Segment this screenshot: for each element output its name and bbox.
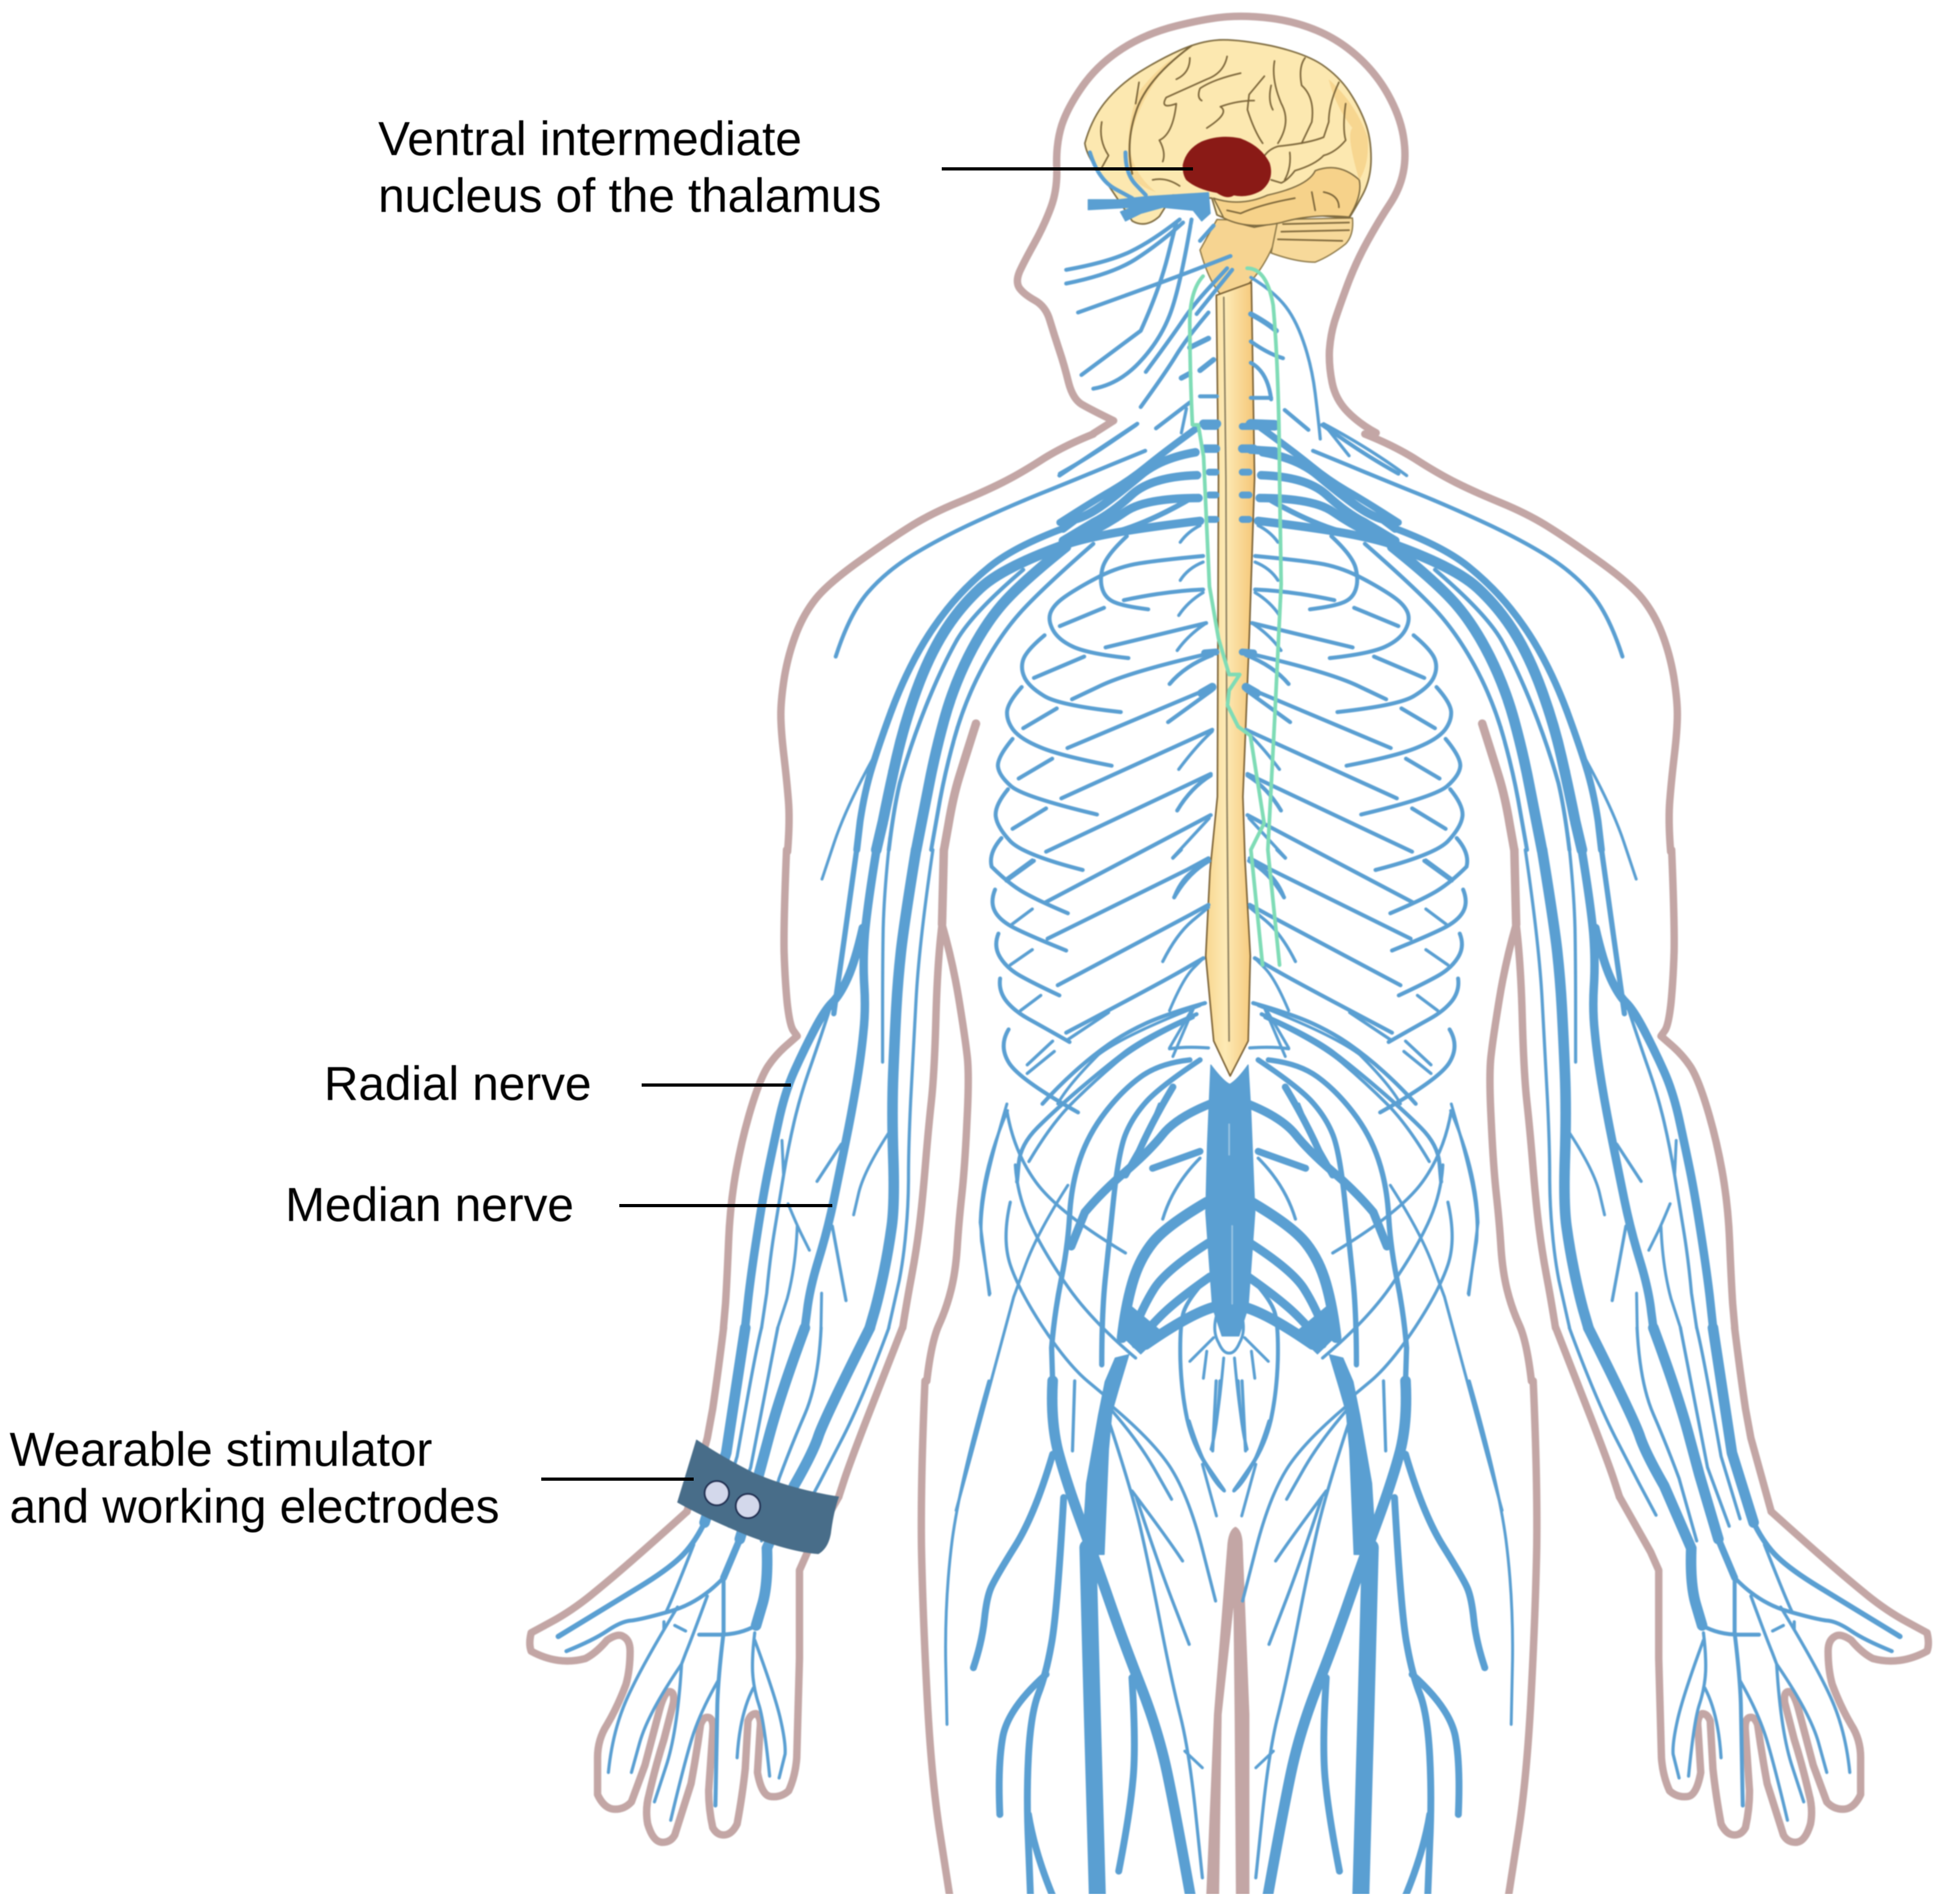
- brain: [1085, 40, 1371, 294]
- label: wearable stimulator: and working electrodes: [10, 1480, 499, 1533]
- thalamus target, dark red: [1183, 137, 1271, 197]
- arm nerves, upper arm to forearm: [745, 850, 1008, 1328]
- leader line: radial nerve: [642, 1083, 791, 1087]
- cranial and cervical nerves: [1060, 152, 1407, 475]
- all text labels: [10, 113, 881, 1533]
- inner leg outline: [1207, 1527, 1249, 1901]
- sulci: [1101, 46, 1345, 214]
- mid thoracic ribs: [991, 838, 1208, 1104]
- pelvic nerves: [1180, 1277, 1224, 1490]
- brachial plexus roots: [1060, 428, 1197, 523]
- frontal lobe shading: [1128, 58, 1173, 192]
- arm nerve bundle: [857, 528, 1063, 850]
- forearm and hand nerves: [558, 1328, 889, 1820]
- sciatic trunk: [1082, 1355, 1129, 1555]
- electrode 2: [736, 1494, 760, 1518]
- lumbar roots: [1071, 1104, 1210, 1246]
- leader line: wearable stimulator: [541, 1478, 694, 1481]
- leader line: thalamus: [942, 167, 1193, 170]
- cervical stubs, left: [1190, 338, 1208, 347]
- label: median nerve: Median nerve: [285, 1179, 574, 1232]
- spinal cord midline: [1224, 297, 1229, 1041]
- cervical stubs, right: [1251, 314, 1276, 331]
- trunk midline: [1229, 1124, 1232, 1304]
- head and neck outline: [1017, 16, 1405, 434]
- spine side branches: [1180, 562, 1203, 580]
- accessory nerve behind neck: [1251, 277, 1320, 439]
- left half of the body: [530, 425, 1246, 1904]
- flank nerves: [980, 1111, 1008, 1295]
- cerebrum: [1085, 40, 1371, 227]
- green autonomic pathway, left strand: [1190, 276, 1264, 965]
- lower rib hooks and abdominal nerves: [956, 1009, 1231, 1555]
- label: thalamus target: Ventral intermediate: [378, 113, 802, 166]
- temporal lobe shading: [1214, 168, 1360, 226]
- cerebellum folds: [1278, 223, 1349, 241]
- wearable stimulator band: [678, 1440, 839, 1554]
- upper thoracic arcs: [1101, 536, 1148, 609]
- bottom crop edge: [0, 1894, 1935, 1904]
- green autonomic pathway, right strand: [1247, 268, 1281, 965]
- label: wearable stimulator: Wearable stimulator: [10, 1423, 432, 1476]
- cerebellum: [1271, 218, 1353, 262]
- spinal cord: [1206, 283, 1255, 1076]
- nerves of the shoulder and upper chest: [822, 425, 1216, 902]
- leg nerves: [945, 1381, 1246, 1904]
- lumbar nerve trunk: [1206, 1065, 1255, 1336]
- label: radial nerve: Radial nerve: [324, 1057, 592, 1111]
- electrode 1: [705, 1481, 729, 1505]
- leader line: median nerve: [619, 1204, 832, 1207]
- palm and finger branches: [558, 1523, 705, 1636]
- mirrored right half of the body: [1213, 425, 1929, 1904]
- occipital shading: [1329, 79, 1368, 180]
- optic and cranial nerve bundle: [1088, 193, 1210, 221]
- body outline, one side: [530, 434, 1093, 1901]
- full figure artwork: [530, 16, 1929, 1904]
- label: thalamus target: nucleus of the thalamus: [378, 169, 881, 223]
- brainstem: [1200, 219, 1283, 294]
- shoulder cutaneous nerve: [836, 451, 1145, 656]
- spine stubs: [1205, 423, 1216, 430]
